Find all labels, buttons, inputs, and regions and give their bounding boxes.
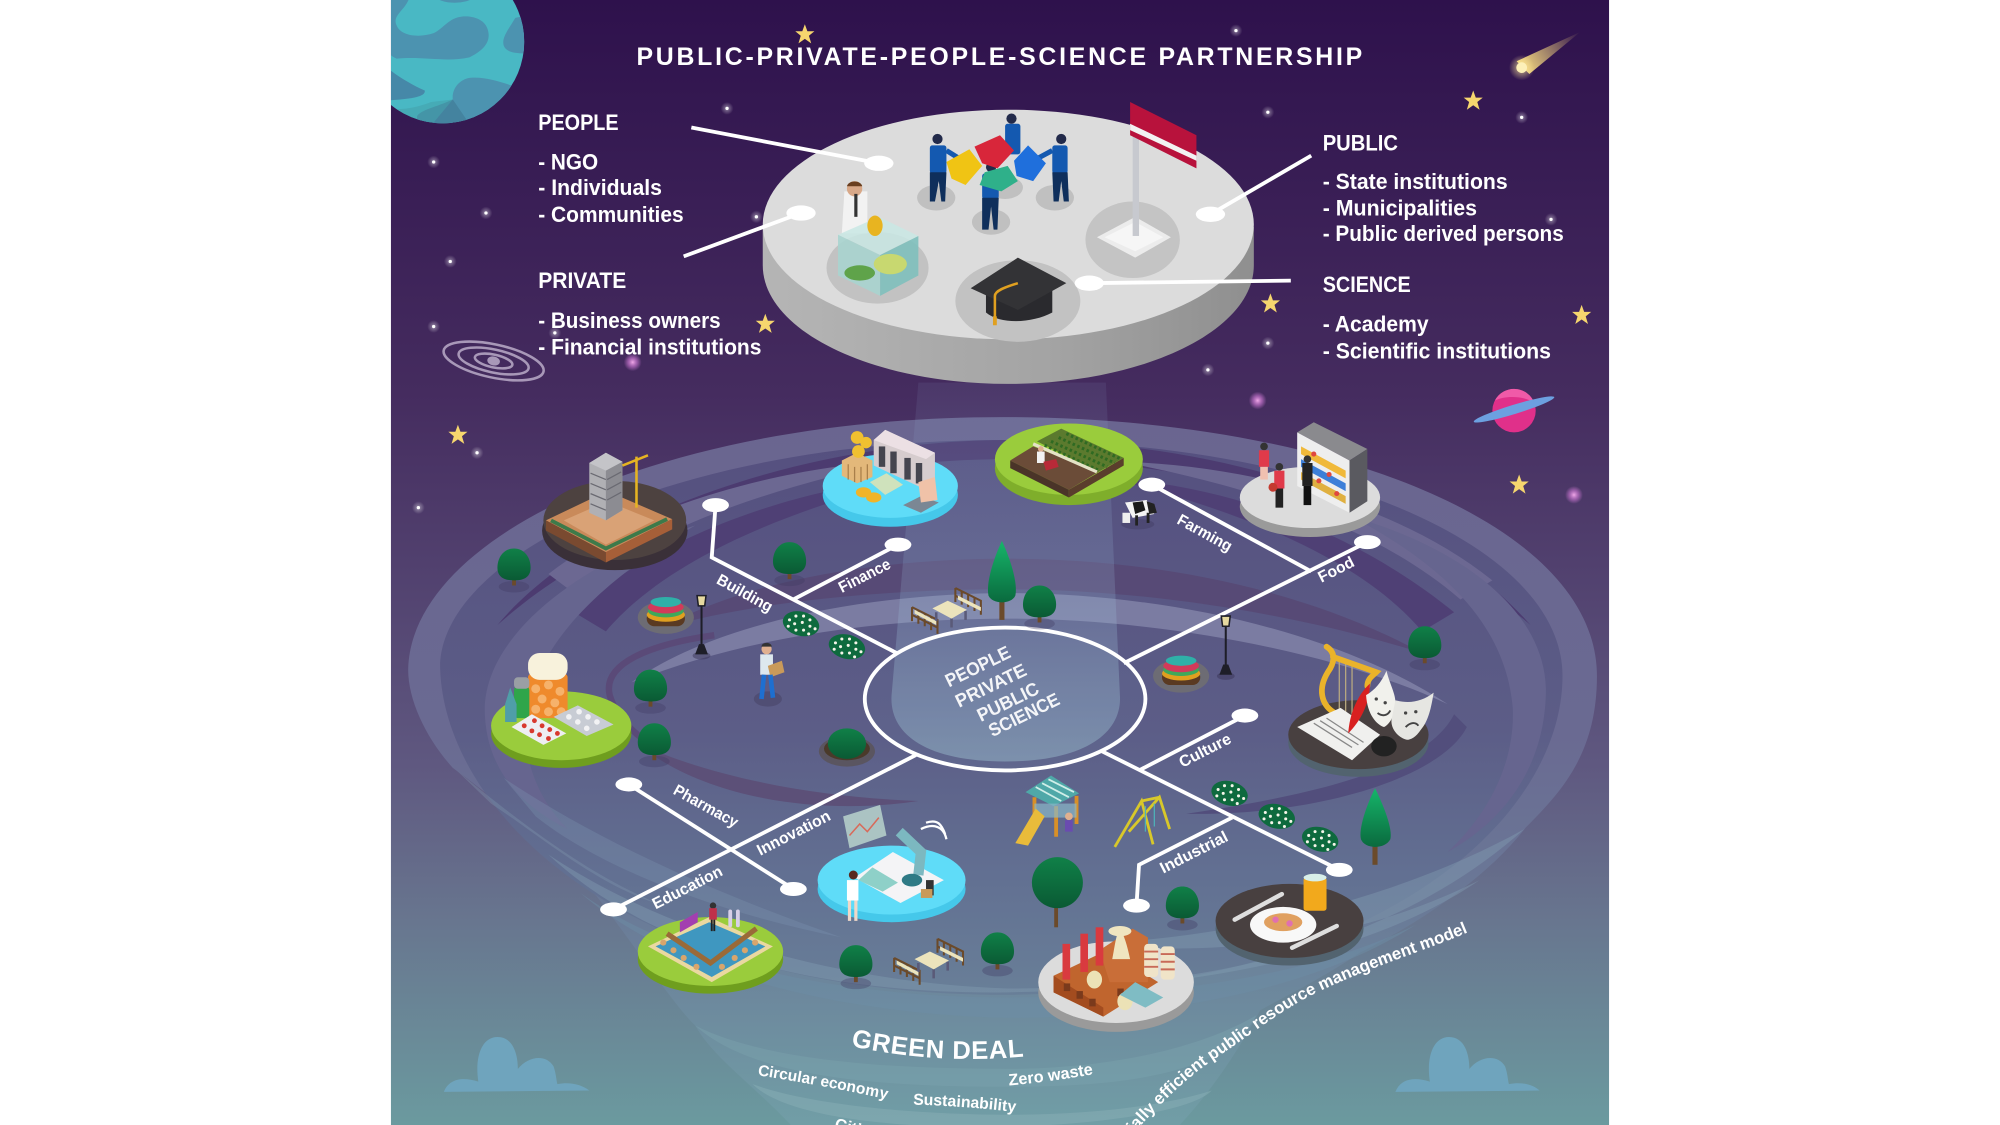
label: culture: Culture: [1176, 731, 1234, 771]
tree 4: [638, 723, 671, 767]
icon: cow: [1121, 500, 1157, 529]
hub text: [944, 646, 1060, 736]
private item business owners: - Business owners: [538, 308, 721, 333]
lamp post left: [693, 596, 710, 659]
line: lower right main: [1102, 751, 1339, 870]
conifer tree upper: [988, 541, 1016, 620]
hub word: science: SCIENCE: [985, 688, 1063, 741]
flower bed right: [1153, 656, 1209, 693]
gold stars: [448, 24, 1591, 494]
title: PUBLIC-PRIVATE-PEOPLE-SCIENCE PARTNERSHIP: [636, 43, 1362, 71]
hub word: people: PEOPLE: [942, 641, 1014, 691]
node dots: [600, 478, 1381, 916]
sector: pharmacy: [491, 653, 631, 768]
star 1: [795, 24, 814, 43]
dot: building: [702, 498, 729, 512]
sector: factory: [1038, 926, 1194, 1032]
people item individuals: - Individuals: [538, 175, 662, 200]
round trees: [497, 542, 1441, 989]
star 6: [448, 425, 467, 444]
star 7: [1510, 474, 1529, 494]
dot: industrial: [1123, 899, 1150, 913]
label: farming: Farming: [1174, 512, 1235, 556]
text block: public: [1323, 131, 1564, 246]
callout: public: [1196, 156, 1311, 222]
people heading: PEOPLE: [538, 110, 619, 135]
page background panel: [391, 0, 1609, 1125]
text block: science: [1323, 272, 1551, 363]
hub word: private: PRIVATE: [952, 659, 1030, 712]
dot: education: [600, 902, 627, 916]
dot: pharmacy start: [615, 777, 642, 791]
green deal heading: GREEN DEAL: [853, 1030, 1024, 1059]
upper platform disc: [763, 110, 1254, 384]
tree on stone ring: [819, 728, 875, 767]
callout: people: [691, 128, 893, 171]
label: education: Education: [650, 863, 726, 913]
sector: farming: [995, 423, 1143, 505]
dot: innovation: [780, 882, 807, 896]
sector: innovation: [818, 805, 966, 922]
connector lines: [614, 485, 1367, 909]
star 2: [1464, 91, 1483, 110]
bench lower: [894, 939, 963, 985]
icon: flag: [1085, 102, 1196, 278]
tree 6: [1408, 626, 1441, 670]
tree 9: [981, 932, 1014, 976]
line: food: [1124, 542, 1367, 663]
label: food: Food: [1316, 554, 1357, 586]
public item municipalities: - Municipalities: [1323, 196, 1477, 221]
swing set: [1115, 797, 1170, 847]
person carrying box: [754, 643, 784, 707]
line: farming: [1152, 485, 1311, 571]
cloud right: [1395, 1037, 1540, 1092]
label: zero waste: Zero waste: [1009, 1066, 1092, 1086]
public heading: PUBLIC: [1323, 131, 1398, 156]
hub word: public: PUBLIC: [973, 678, 1042, 726]
lamp post right: [1217, 616, 1235, 680]
public item public derived persons: - Public derived persons: [1323, 221, 1564, 246]
comet: [1509, 32, 1580, 80]
star 4: [1261, 293, 1280, 312]
planet pink with ring: [1472, 389, 1556, 432]
sector: food store: [1240, 422, 1380, 537]
sector: education: [638, 902, 783, 994]
tree 5: [1023, 585, 1056, 629]
spotlight beam: [891, 383, 1120, 761]
line: finance: [793, 548, 891, 600]
line: industrial: [1136, 818, 1232, 906]
galaxy: [440, 334, 547, 388]
bush 4: [1256, 800, 1298, 833]
central hub circle: [865, 628, 1145, 770]
label: industrial: Industrial: [1157, 829, 1231, 877]
large round tree: [1032, 857, 1083, 927]
dot: food: [1354, 535, 1381, 549]
playground house: [1015, 776, 1079, 846]
tree 3: [634, 670, 667, 714]
bush 2: [826, 630, 868, 663]
private item financial institutions: - Financial institutions: [538, 335, 761, 360]
label: circular economy: Circular economy: [758, 1065, 889, 1101]
flower bed left: [638, 597, 694, 634]
tree 7: [1166, 886, 1199, 930]
label: sustainability: Sustainability: [914, 1094, 1016, 1114]
science item scientific institutions: - Scientific institutions: [1323, 338, 1551, 363]
bench upper: [912, 588, 981, 634]
bush 3: [1209, 777, 1250, 810]
private heading: PRIVATE: [538, 268, 626, 293]
icon: team solving puzzle: [917, 114, 1074, 235]
callout: science: [1075, 276, 1291, 291]
tree 1: [497, 548, 531, 592]
line: education and innovation: [614, 755, 916, 909]
bush 5: [1299, 823, 1341, 856]
public item state institutions: - State institutions: [1323, 169, 1508, 194]
label: innovation: Innovation: [754, 808, 834, 859]
sector: finance: [823, 430, 958, 527]
star 3: [756, 314, 775, 333]
line: building: [712, 505, 897, 653]
dot: culture: [1232, 709, 1258, 723]
white dots field: [412, 24, 1557, 514]
label: pharmacy: Pharmacy: [670, 782, 741, 832]
people item ngo: - NGO: [538, 150, 598, 175]
science heading: SCIENCE: [1323, 272, 1411, 297]
sector: building: [542, 453, 688, 570]
bush 1: [780, 607, 822, 640]
science item academy: - Academy: [1323, 312, 1429, 337]
text block: people: [538, 110, 684, 227]
tornado funnel: [408, 417, 1597, 1125]
label: building: Building: [714, 572, 775, 616]
people item communities: - Communities: [538, 202, 684, 227]
text block: private: [538, 268, 761, 360]
conifer tree lower: [1360, 788, 1391, 865]
line: pharmacy: [635, 788, 788, 885]
pink glow dots: [624, 353, 1583, 504]
sector: culture: [1288, 647, 1434, 777]
dot: farming: [1138, 478, 1165, 492]
icon: donation box: [827, 181, 929, 304]
icon: graduation cap: [955, 258, 1080, 342]
sector: food plate: [1216, 874, 1364, 966]
label: finance: Finance: [836, 556, 894, 597]
tree 2: [773, 542, 806, 586]
line: culture: [1140, 719, 1238, 770]
sector labels: [650, 512, 1357, 913]
star 5: [1572, 305, 1591, 324]
dot: finance: [885, 538, 911, 552]
dotted bushes: [780, 607, 1341, 856]
callout: private: [684, 205, 816, 256]
cloud left: [444, 1037, 589, 1092]
planet teal: [361, 0, 528, 128]
dot: lower right: [1326, 863, 1353, 877]
tree 8: [839, 945, 872, 989]
